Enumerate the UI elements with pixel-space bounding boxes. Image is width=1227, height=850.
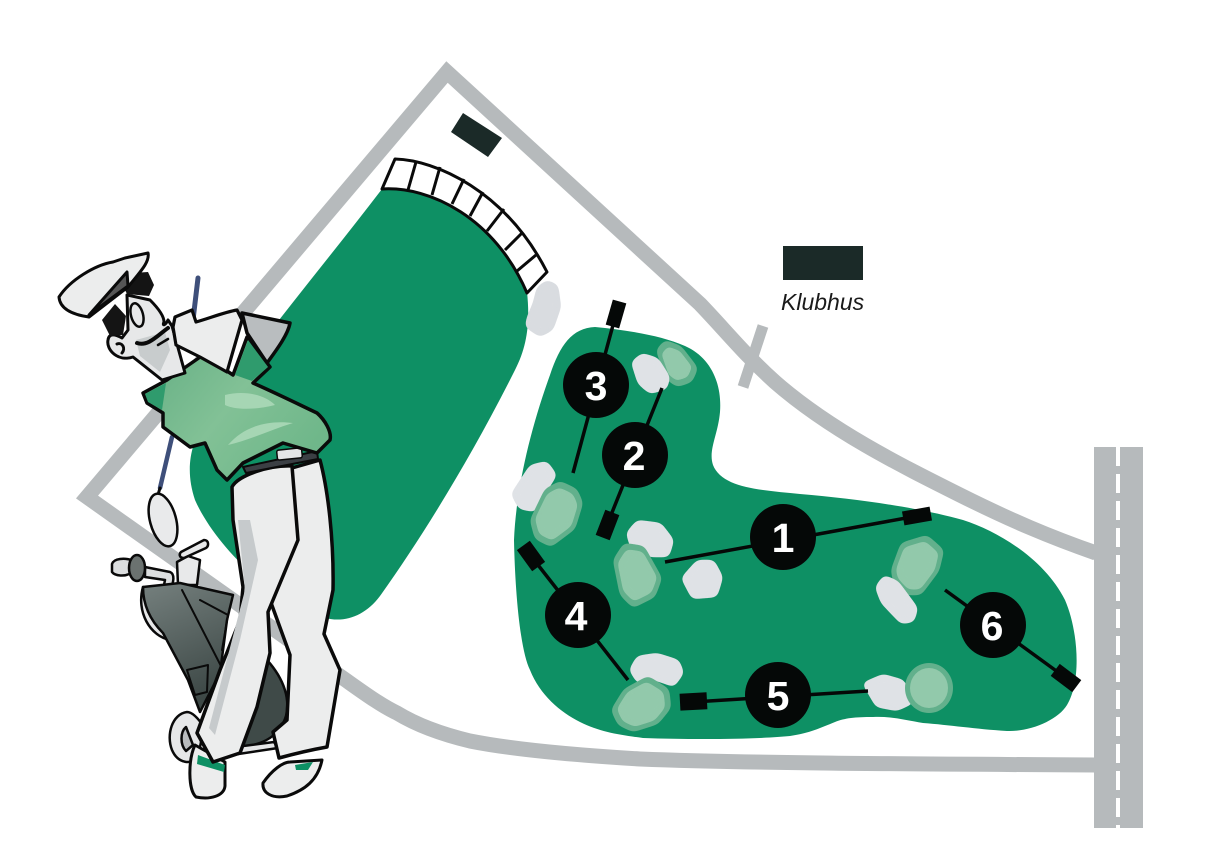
- property boundary path: [87, 72, 1096, 765]
- hazard pair by hole 5: [862, 663, 953, 713]
- trouser shading: [209, 520, 258, 735]
- hole number 2: [602, 422, 668, 488]
- hole number 6: 6: [981, 603, 1003, 649]
- hole number 5: [745, 662, 811, 728]
- hazard pair by hole 3: [631, 340, 698, 394]
- belt buckle: [277, 448, 302, 460]
- clubhouse building and label: Klubhus: [781, 289, 865, 315]
- driving range tee bays: [382, 159, 547, 293]
- face shading: [136, 332, 170, 372]
- club shaft and head: [143, 437, 183, 549]
- arm and hand: [173, 310, 242, 372]
- hole number 6: [960, 592, 1026, 658]
- trousers front leg: [197, 466, 298, 762]
- hazard pair by hole 3 lower: [511, 461, 583, 547]
- round bunker: [681, 560, 723, 599]
- hole number 3: [563, 352, 629, 418]
- hazard pair by hole 6: [875, 535, 944, 624]
- belt: [243, 451, 318, 473]
- shoes: [190, 745, 322, 798]
- hole number 1: 1: [772, 515, 794, 561]
- trousers back leg: [265, 460, 340, 758]
- gray cross path: [743, 326, 763, 387]
- main road: [1094, 447, 1143, 828]
- eye and mustache details: [117, 302, 168, 353]
- golfer illustration with bag: [59, 253, 340, 798]
- hole number 3: 3: [585, 363, 607, 409]
- hair: [102, 272, 154, 336]
- cap: [59, 253, 148, 317]
- hazard pair by hole 4: [611, 653, 684, 732]
- top building: [451, 113, 502, 157]
- hole number 2: 2: [623, 433, 645, 479]
- hole lines and tee markers: [517, 300, 1081, 711]
- hole number 4: [545, 582, 611, 648]
- upper club grip: [193, 278, 198, 320]
- hole number 5: 5: [767, 673, 789, 719]
- hazard pair by hole 1: [613, 520, 674, 608]
- shirt dark sleeve accents: [145, 340, 268, 410]
- driving range green: [190, 189, 528, 620]
- bunker near range: [525, 280, 561, 337]
- six-hole course green: [514, 327, 1077, 739]
- hole number 4: 4: [565, 593, 588, 639]
- golf bag: [112, 540, 287, 762]
- shirt highlights: [225, 393, 293, 445]
- clubhouse building and label: [781, 246, 865, 315]
- neck and face: [108, 295, 185, 380]
- back arm: [242, 313, 290, 363]
- green shirt: [143, 337, 330, 480]
- hazards and bunkers: [511, 340, 953, 732]
- hole number 1: [750, 504, 816, 570]
